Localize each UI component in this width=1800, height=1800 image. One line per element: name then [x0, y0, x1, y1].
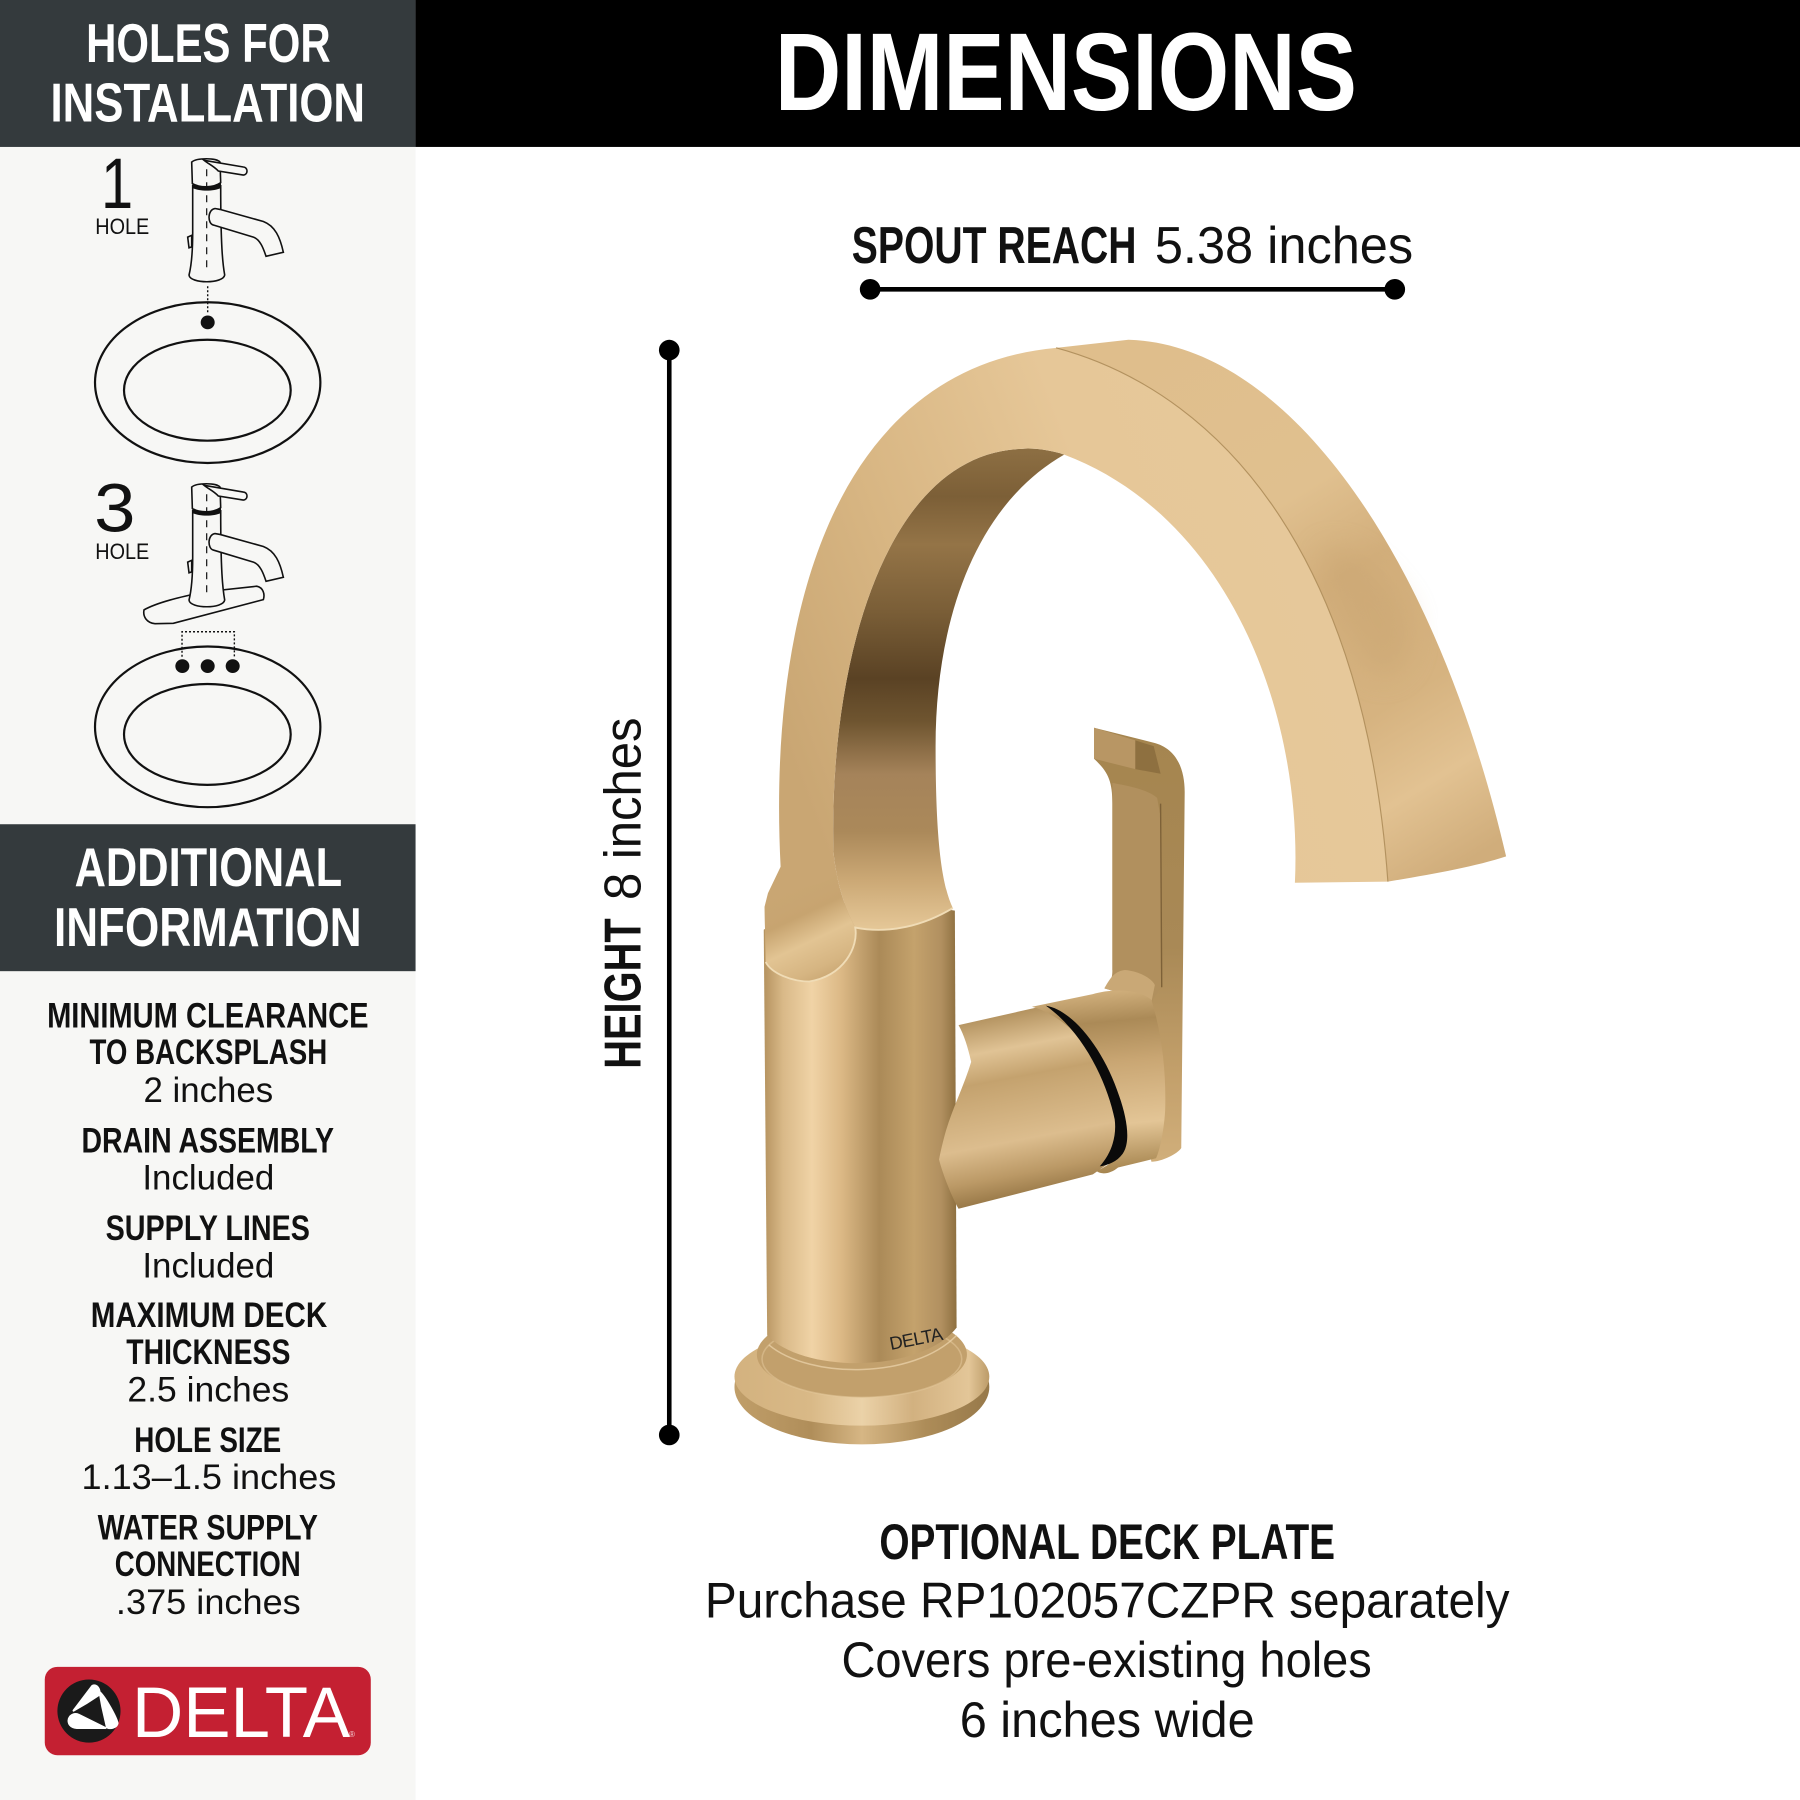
- spec: maximum deck thickness: MAXIMUM DECK: [91, 1295, 327, 1335]
- heading: additional information: [0, 824, 416, 971]
- dimension: height: 8 inches: [594, 717, 652, 900]
- spec: maximum deck thickness: 2.5 inches: [127, 1370, 289, 1410]
- text block: optional deck plate: OPTIONAL DECK PLATE: [879, 1513, 1335, 1570]
- heading: holes for installation: INSTALLATION: [51, 72, 365, 134]
- faucet: lever handle: [1094, 728, 1185, 1162]
- label: 3 hole: 3: [94, 470, 135, 547]
- spout front face: [765, 348, 1388, 982]
- heading: additional information: ADDITIONAL: [75, 836, 342, 898]
- spec: drain assembly: DRAIN ASSEMBLY: [82, 1121, 334, 1161]
- faucet: horizontal handle barrel: [939, 999, 1131, 1209]
- spec: drain assembly: [82, 1121, 334, 1197]
- logo: delta: [45, 1667, 371, 1755]
- spec: water supply connection: CONNECTION: [115, 1544, 301, 1584]
- spec: drain assembly: Included: [142, 1157, 274, 1197]
- text block: optional deck plate: Covers pre-existing holes: [841, 1631, 1372, 1688]
- spec: minimum clearance: TO BACKSPLASH: [90, 1032, 327, 1072]
- logo: delta: ®: [349, 1730, 355, 1739]
- spec: water supply connection: [98, 1507, 318, 1622]
- spec: maximum deck thickness: THICKNESS: [126, 1332, 290, 1372]
- dimension: spout reach: 5.38 inches: [1155, 216, 1413, 274]
- text block: optional deck plate: 6 inches wide: [960, 1691, 1255, 1748]
- label: 1 hole: [95, 145, 149, 239]
- spec: supply lines: [106, 1208, 310, 1286]
- dimension: height: [594, 340, 680, 1445]
- spec: supply lines: SUPPLY LINES: [106, 1208, 310, 1248]
- spec: minimum clearance: [47, 995, 368, 1110]
- flange edge highlights: [766, 908, 953, 982]
- panel: left sidebar: [0, 0, 416, 1800]
- spec: water supply connection: WATER SUPPLY: [98, 1507, 318, 1547]
- dimension: spout reach: [852, 216, 1413, 300]
- text block: optional deck plate: [705, 1513, 1510, 1748]
- heading: holes for installation: HOLES FOR: [86, 12, 331, 74]
- spec: minimum clearance: MINIMUM CLEARANCE: [47, 995, 368, 1035]
- icon: delta triangle mark: [69, 1685, 118, 1728]
- spec: hole size: 1.13–1.5 inches: [82, 1457, 336, 1497]
- label: 3 hole: HOLE: [95, 539, 149, 564]
- spec: maximum deck thickness: [91, 1295, 327, 1410]
- spec: hole size: HOLE SIZE: [134, 1420, 281, 1460]
- spec: water supply connection: .375 inches: [116, 1582, 301, 1622]
- heading: dimensions: [416, 0, 1800, 147]
- heading: dimensions: DIMENSIONS: [775, 11, 1357, 134]
- spout flange highlight: [765, 872, 856, 982]
- spout seam line: [1056, 348, 1388, 882]
- label: 1 hole: HOLE: [95, 214, 149, 239]
- spout inner dark band: [833, 449, 1064, 930]
- text block: optional deck plate: Purchase RP102057CZPR separately: [705, 1571, 1510, 1628]
- dimension: height: HEIGHT: [594, 918, 652, 1069]
- faucet illustration: [734, 340, 1506, 1444]
- spec: supply lines: Included: [142, 1246, 274, 1286]
- icon: single hole faucet and sink: [95, 159, 320, 463]
- heading: holes for installation: [0, 0, 416, 147]
- logo: delta: DELTA: [132, 1674, 351, 1753]
- faucet: arched spout: [765, 340, 1506, 982]
- heading: additional information: INFORMATION: [54, 896, 362, 958]
- label: 3 hole: [94, 470, 149, 564]
- dimension: spout reach: SPOUT REACH: [852, 216, 1136, 274]
- icon: three hole faucet with plate and sink: [95, 484, 320, 807]
- spout side shading: [1320, 549, 1411, 677]
- spec list: [47, 995, 368, 1622]
- faucet: base and column: [734, 903, 989, 1444]
- spec: minimum clearance: 2 inches: [143, 1070, 273, 1110]
- faucet: black gap line: [1046, 1006, 1127, 1166]
- label: 1 hole: 1: [101, 145, 133, 224]
- spec: hole size: [82, 1420, 336, 1497]
- spout side face: [1056, 340, 1506, 882]
- faucet: handle collar: [1032, 990, 1165, 1173]
- faucet: delta engraving: DELTA: [888, 1323, 945, 1354]
